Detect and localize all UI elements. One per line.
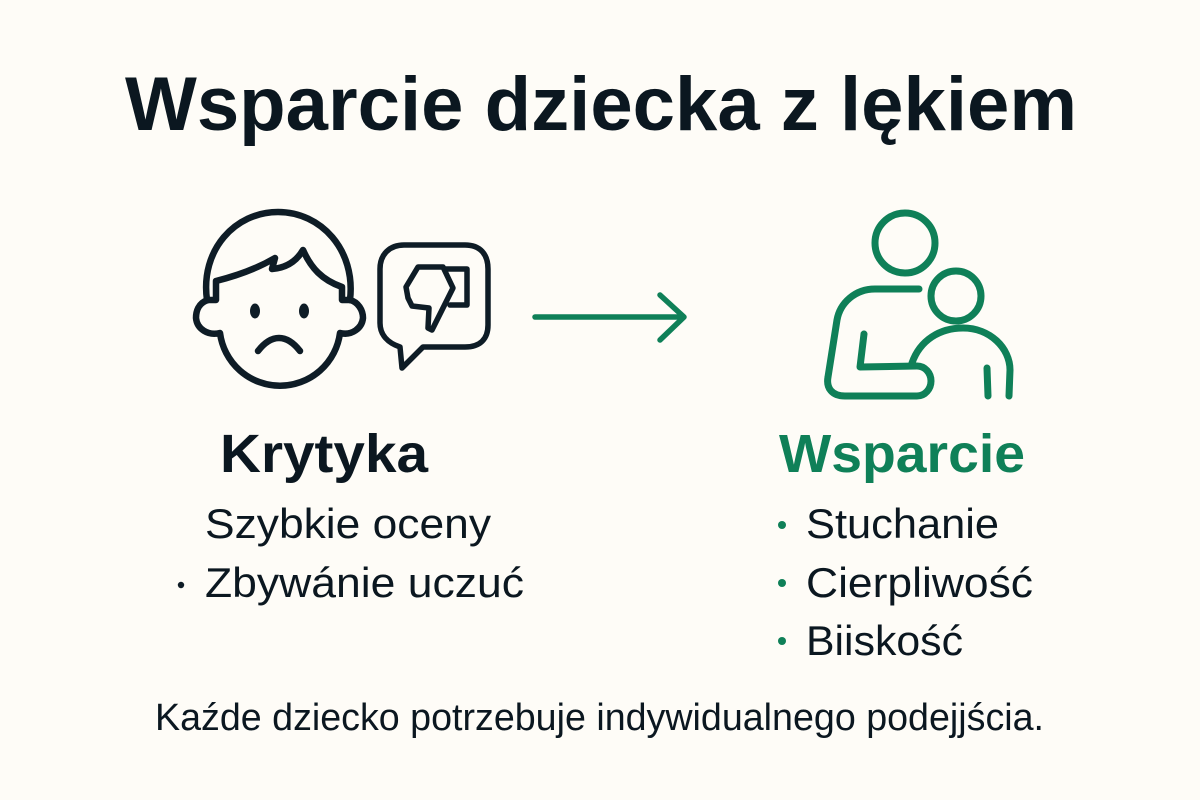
title: Wsparcie dziecka z lękiem — [125, 62, 1077, 147]
text: Biiskość: Biiskość — [806, 617, 963, 664]
text: Szybkie oceny: Szybkie oceny — [205, 500, 491, 547]
bullet — [778, 637, 786, 645]
bullet — [178, 582, 184, 588]
panel: Krytyka — [178, 424, 524, 606]
icon: speech bubble with thumbs down — [380, 245, 488, 368]
heading: Krytyka: Krytyka — [220, 424, 429, 484]
icon: adult supporting child — [828, 213, 1010, 396]
bullet — [778, 521, 786, 529]
panel: Wsparcie — [778, 424, 1033, 664]
text: Stuchanie: Stuchanie — [806, 500, 999, 547]
icon: sad child face — [196, 212, 363, 386]
text: Zbywánie uczuć: Zbywánie uczuć — [205, 559, 524, 606]
bullet — [778, 579, 786, 587]
footer note: Kaźde dziecko potrzebuje indywidualnego podejjścia. — [155, 697, 1044, 739]
arrow — [535, 295, 684, 340]
text: Cierpliwość: Cierpliwość — [806, 559, 1033, 606]
heading: Wsparcie: Wsparcie — [779, 424, 1025, 484]
